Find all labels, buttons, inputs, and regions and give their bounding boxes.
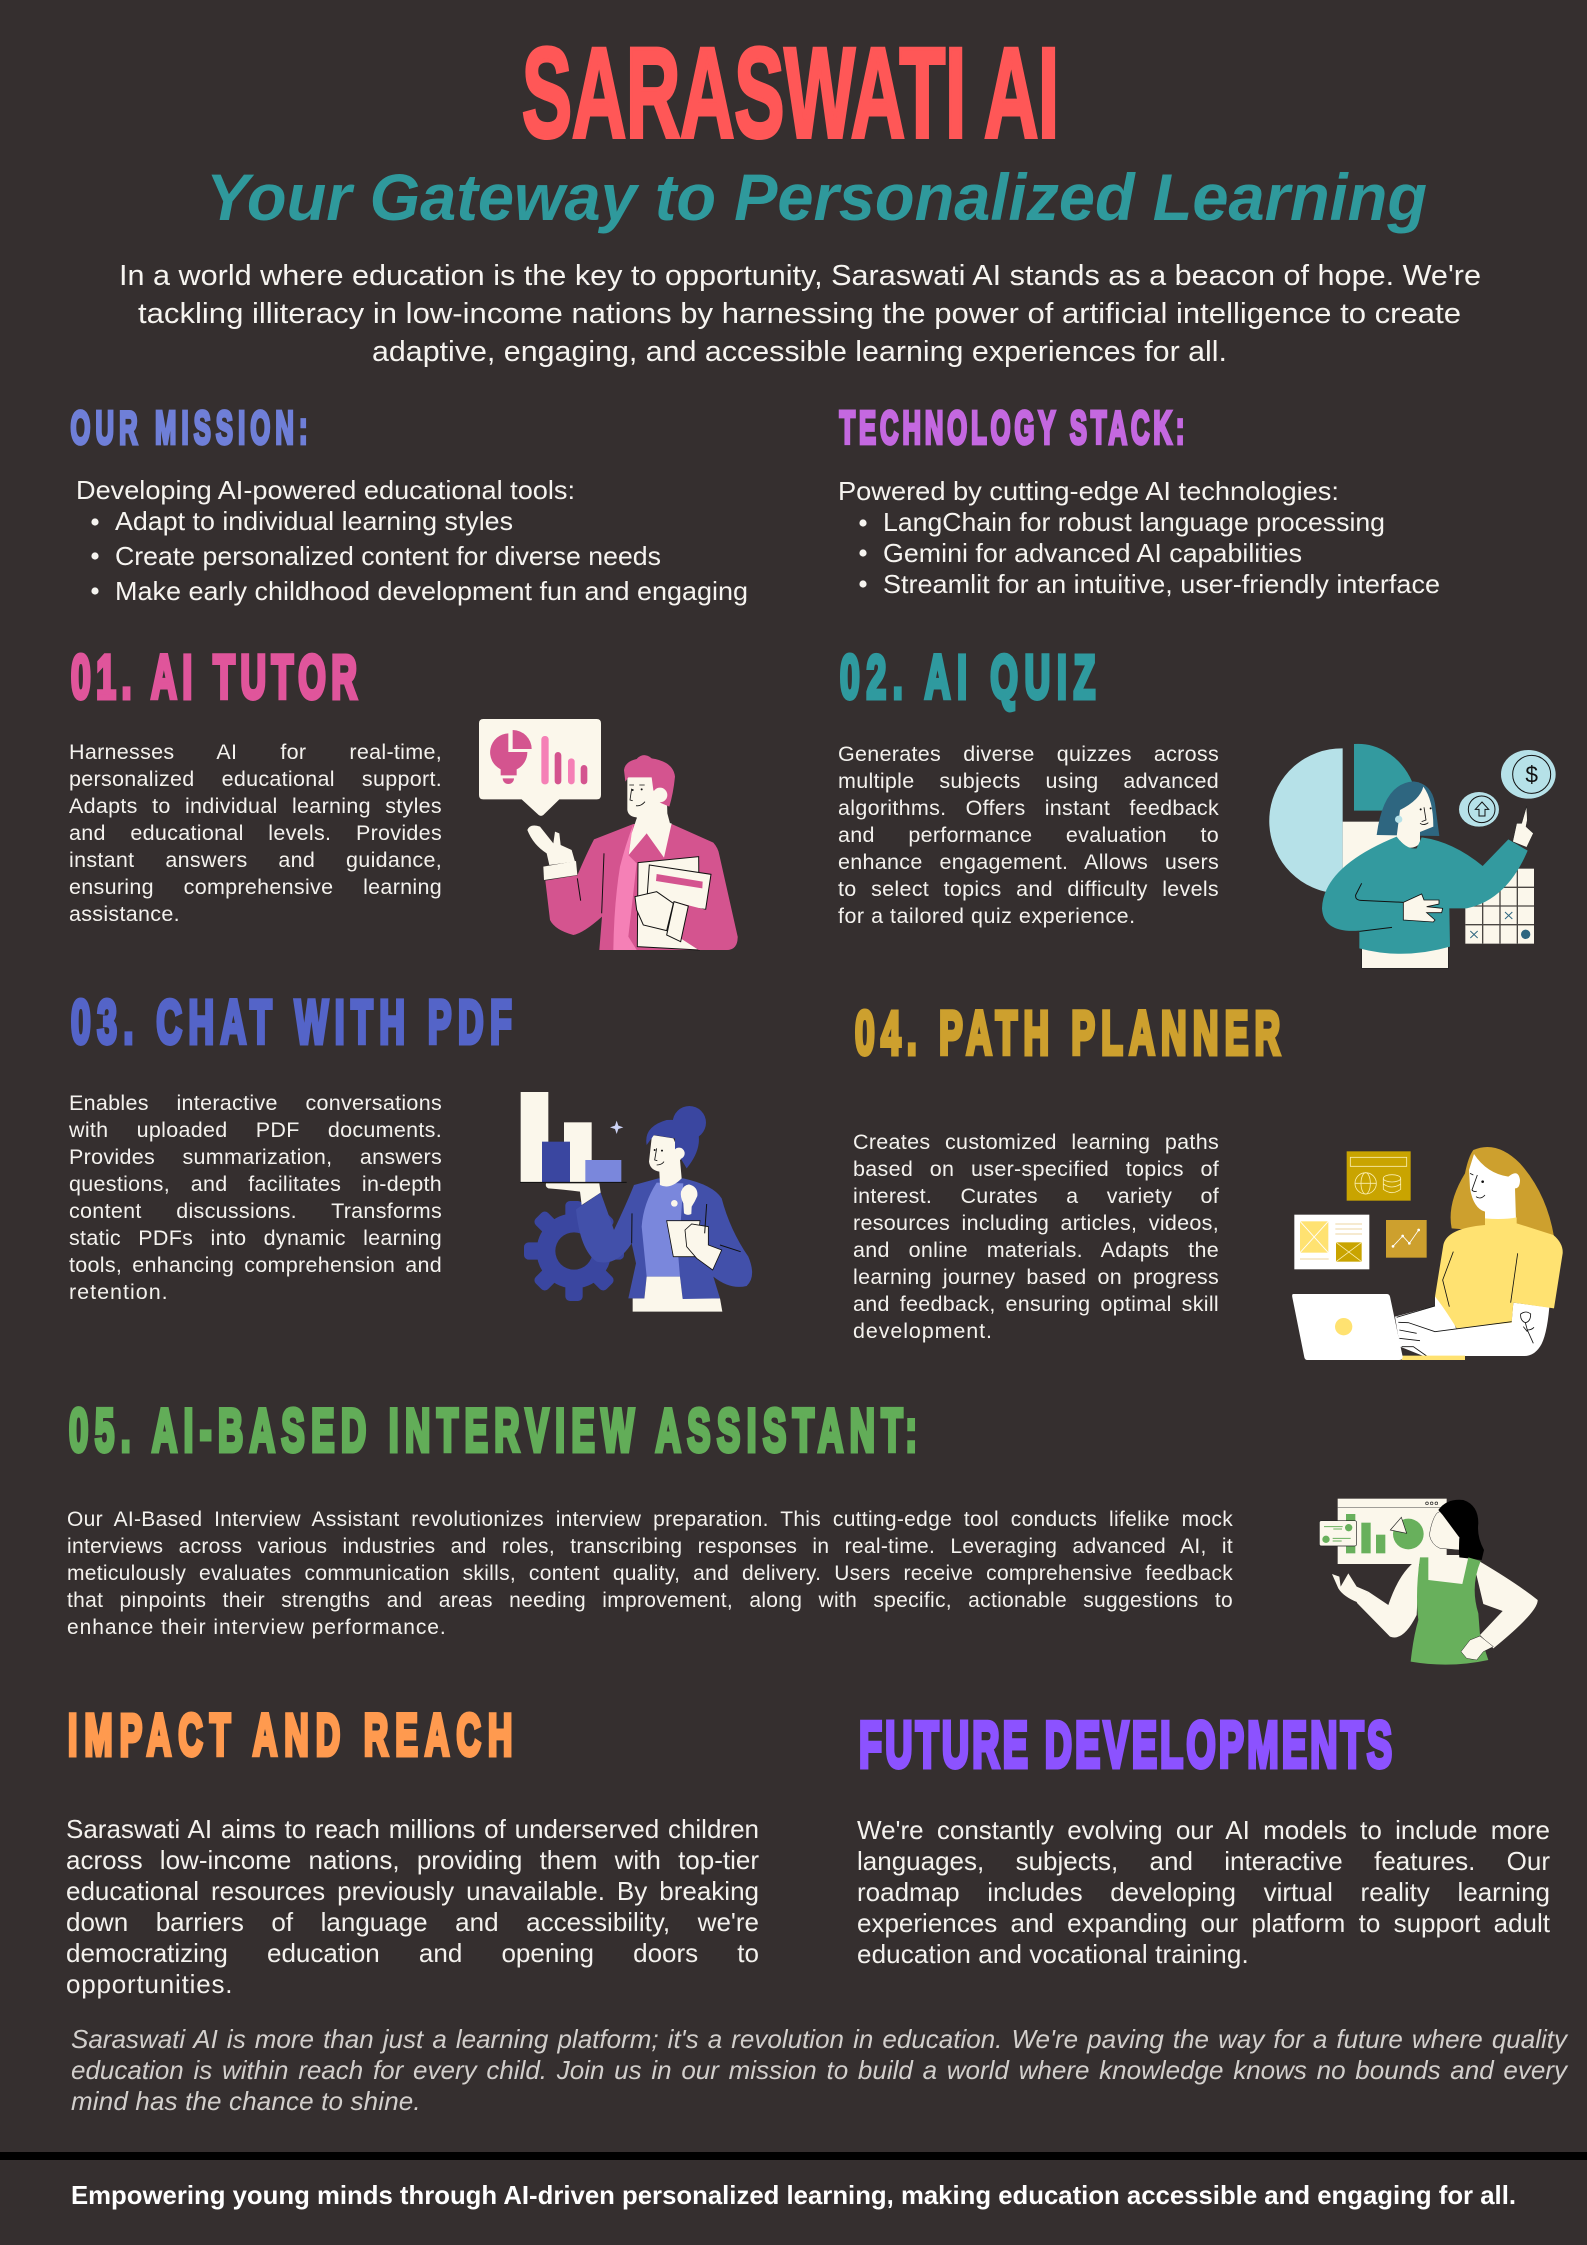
mission list: Developing AI-powered educational tools: xyxy=(76,475,575,505)
subtitle: Your Gateway to Personalized Learning xyxy=(206,160,1427,234)
heading: 05 AI-based interview assistant: 05. AI-BASED INTERVIEW ASSISTANT: xyxy=(69,1398,917,1464)
text: impact and reach: democratizing education and opening doors to xyxy=(66,1938,759,1968)
text: path planner description: learning journey based on progress xyxy=(853,1265,1219,1289)
text: path planner description: resources including articles, videos, xyxy=(853,1211,1219,1235)
intro paragraph: adaptive, engaging, and accessible learning experiences for all. xyxy=(372,336,1227,368)
text: path planner description: and online materials. Adapts the xyxy=(853,1238,1219,1262)
text: interview assistant description xyxy=(67,1508,1233,1639)
text: AI tutor description: personalized educational support. xyxy=(69,767,442,791)
text: chat with PDF description: Enables interactive conversations xyxy=(69,1091,442,1115)
text: AI quiz description: and performance evaluation to xyxy=(838,823,1219,847)
text: AI tutor description xyxy=(69,740,442,926)
footer tagline: Empowering young minds through AI-driven personalized learning, making education accessible and engaging for all. xyxy=(71,2180,1516,2210)
heading: 04 path planner: 04. PATH PLANNER xyxy=(855,999,1280,1067)
text: chat with PDF description: static PDFs into dynamic learning xyxy=(69,1226,442,1250)
mission list: Create personalized content for diverse needs xyxy=(115,541,661,571)
text: future developments: education and vocational training. xyxy=(857,1939,1249,1969)
text: interview assistant description: Our AI-Based Interview Assistant revolutionizes interview preparation. This cutting-edge tool conducts lifelike mock xyxy=(67,1508,1233,1531)
intro paragraph xyxy=(119,260,1481,368)
title: SARASWATI AI xyxy=(522,22,1059,165)
closing italic statement: Saraswati AI is more than just a learning platform; it's a revolution in education. We're paving the way for a future where quality xyxy=(71,2024,1567,2054)
illustration: woman with bar chart and gear xyxy=(520,1092,752,1312)
heading: 03 chat with PDF: 03. CHAT WITH PDF xyxy=(71,988,512,1056)
text: impact and reach: educational resources previously unavailable. By breaking xyxy=(66,1876,759,1906)
text: future developments: We're constantly evolving our AI models to include more xyxy=(857,1815,1550,1845)
text: chat with PDF description xyxy=(69,1091,442,1304)
text: AI quiz description: to select topics and difficulty levels xyxy=(838,877,1219,901)
text: chat with PDF description: with uploaded PDF documents. xyxy=(69,1118,442,1142)
text: impact and reach: down barriers of language and accessibility, we're xyxy=(66,1907,759,1937)
text: future developments xyxy=(857,1815,1550,1969)
heading: technology stack: TECHNOLOGY STACK: xyxy=(840,401,1184,453)
illustration: woman presenting dashboard xyxy=(1319,1499,1538,1665)
text: AI tutor description: Adapts to individual learning styles xyxy=(69,794,442,818)
text: AI quiz description: Generates diverse quizzes across xyxy=(838,742,1219,766)
closing italic statement xyxy=(71,2024,1568,2116)
illustration: woman at laptop xyxy=(1292,1147,1563,1360)
technology list: LangChain for robust language processing xyxy=(883,507,1385,537)
black divider bar xyxy=(0,2152,1587,2160)
text: AI tutor description: ensuring comprehensive learning xyxy=(69,875,442,899)
closing italic statement: education is within reach for every child. Join us in our mission to build a world where knowledge knows no bounds and every xyxy=(71,2055,1567,2085)
text: chat with PDF description: questions, and facilitates in-depth xyxy=(69,1172,442,1196)
text: path planner description xyxy=(853,1130,1219,1343)
text: AI quiz description: multiple subjects using advanced xyxy=(838,769,1219,793)
text: interview assistant description: that pinpoints their strengths and areas needing improvement, along with specific, actionable suggestions to xyxy=(67,1589,1233,1612)
text: future developments: experiences and expanding our platform to support adult xyxy=(857,1908,1550,1938)
text: path planner description: Creates customized learning paths xyxy=(853,1130,1219,1154)
text: chat with PDF description: content discussions. Transforms xyxy=(69,1199,442,1223)
text: impact and reach xyxy=(66,1814,759,1999)
mission list xyxy=(76,475,748,606)
technology list: Gemini for advanced AI capabilities xyxy=(883,538,1302,568)
heading: our mission: OUR MISSION: xyxy=(70,401,308,453)
text: chat with PDF description: retention. xyxy=(69,1280,169,1304)
technology list: Powered by cutting-edge AI technologies: xyxy=(838,476,1339,506)
heading: 01 AI tutor: 01. AI TUTOR xyxy=(71,643,357,711)
text: AI tutor description: Harnesses AI for real-time, xyxy=(69,740,442,764)
text: future developments: languages, subjects, and interactive features. Our xyxy=(857,1846,1550,1876)
text: impact and reach: across low-income nations, providing them with top-tier xyxy=(66,1845,759,1875)
intro paragraph: In a world where education is the key to opportunity, Saraswati AI stands as a beacon of hope. We're xyxy=(119,260,1481,292)
text: chat with PDF description: tools, enhancing comprehension and xyxy=(69,1253,442,1277)
illustration: man with speech bubble xyxy=(479,719,738,950)
heading: impact and reach: IMPACT AND REACH xyxy=(68,1704,512,1768)
text: AI tutor description: assistance. xyxy=(69,902,180,926)
technology list: Streamlit for an intuitive, user-friendly interface xyxy=(883,569,1440,599)
intro paragraph: tackling illiteracy in low-income nations by harnessing the power of artificial intelligence to create xyxy=(138,298,1461,330)
illustration: woman with pie chart, coins and grid: $ xyxy=(1525,761,1538,787)
text: path planner description: based on user-specified topics of xyxy=(853,1157,1219,1181)
heading: future developments: FUTURE DEVELOPMENTS xyxy=(859,1710,1392,1782)
text: path planner description: interest. Curates a variety of xyxy=(853,1184,1219,1208)
mission list: Make early childhood development fun and engaging xyxy=(115,576,748,606)
text: chat with PDF description: Provides summarization, answers xyxy=(69,1145,442,1169)
technology list xyxy=(838,476,1440,599)
text: AI tutor description: and educational levels. Provides xyxy=(69,821,442,845)
mission list: Adapt to individual learning styles xyxy=(115,506,513,536)
text: future developments: roadmap includes developing virtual reality learning xyxy=(857,1877,1550,1907)
text: AI quiz description: for a tailored quiz experience. xyxy=(838,904,1136,928)
text: AI tutor description: instant answers and guidance, xyxy=(69,848,442,872)
text: impact and reach: opportunities. xyxy=(66,1969,233,1999)
text: interview assistant description: interviews across various industries and roles, transcribing responses in real-time. Leveraging advanced AI, it xyxy=(67,1535,1233,1558)
text: AI quiz description xyxy=(838,742,1219,928)
text: AI quiz description: algorithms. Offers instant feedback xyxy=(838,796,1219,820)
text: path planner description: and feedback, ensuring optimal skill xyxy=(853,1292,1219,1316)
text: interview assistant description: meticulously evaluates communication skills, content quality, and delivery. Users receive comprehensive feedback xyxy=(67,1562,1233,1585)
illustration: woman with pie chart, coins and grid xyxy=(1269,744,1556,968)
heading: 02 AI quiz: 02. AI QUIZ xyxy=(840,643,1095,711)
text: AI quiz description: enhance engagement. Allows users xyxy=(838,850,1219,874)
closing italic statement: mind has the chance to shine. xyxy=(71,2086,421,2116)
text: path planner description: development. xyxy=(853,1319,993,1343)
text: impact and reach: Saraswati AI aims to reach millions of underserved children xyxy=(66,1814,759,1844)
text: interview assistant description: enhance their interview performance. xyxy=(67,1616,447,1639)
